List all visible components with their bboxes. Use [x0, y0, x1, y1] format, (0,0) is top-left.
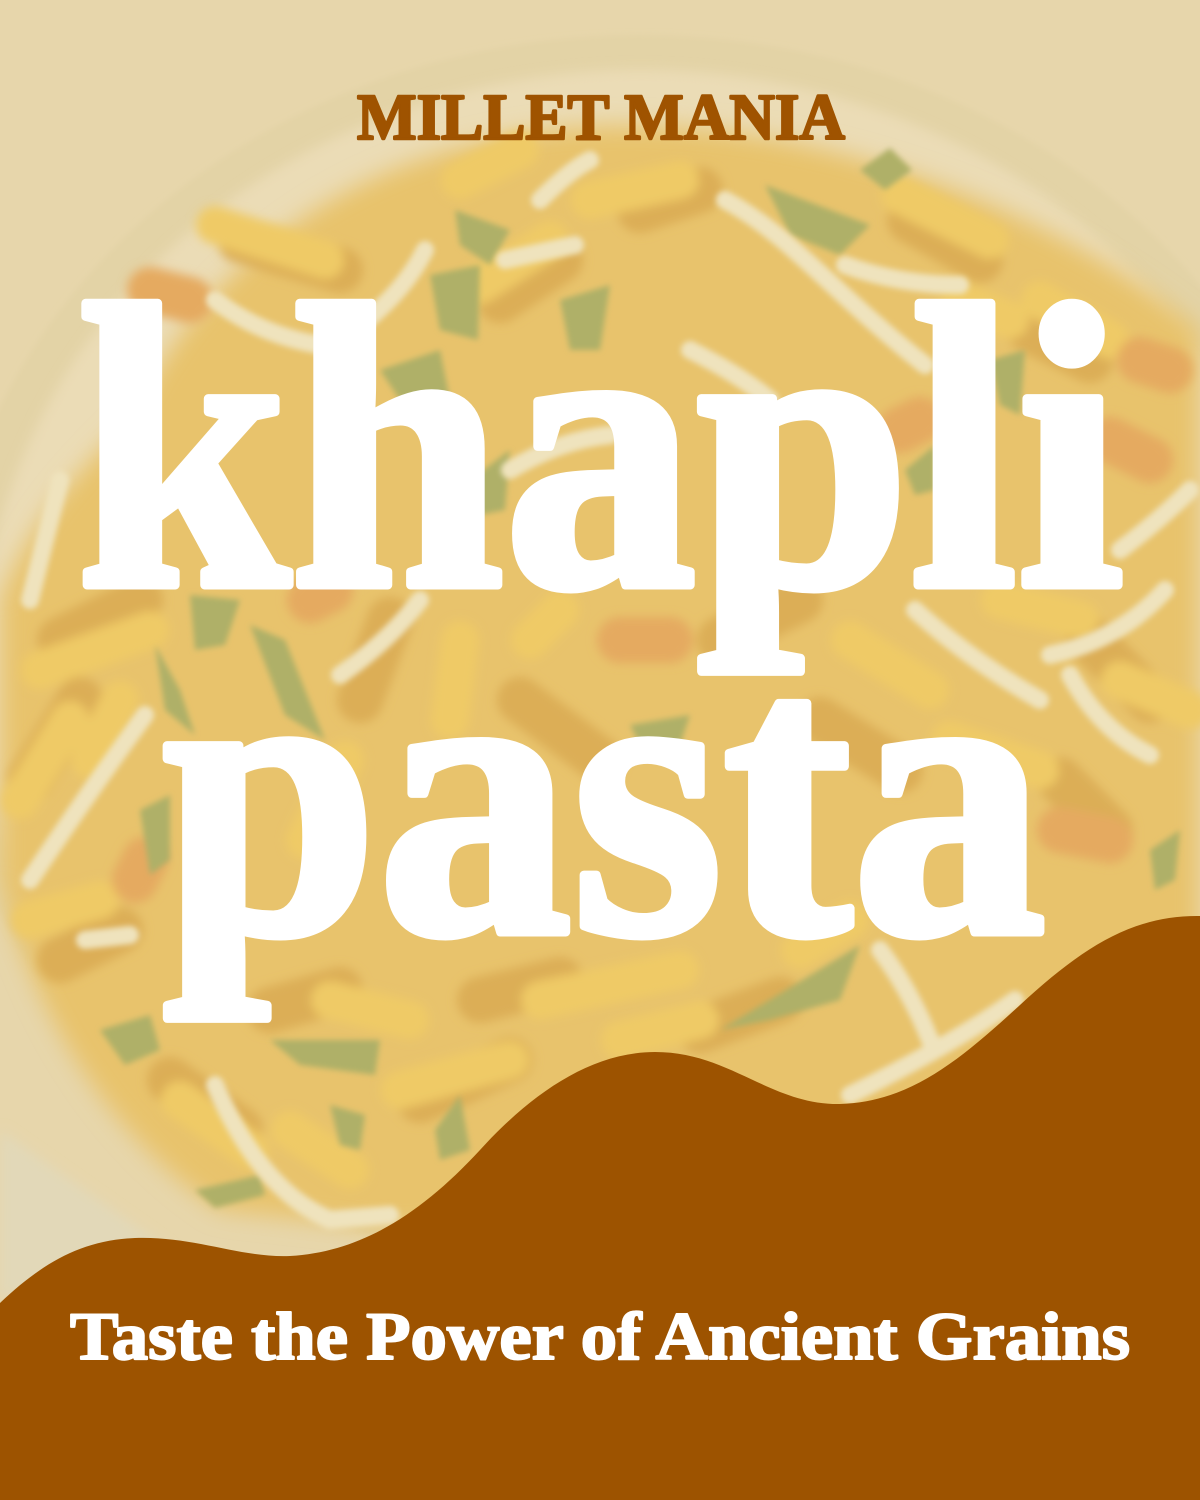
- tablecloth corner: [0, 1130, 170, 1300]
- pasta mass: [0, 125, 1200, 1230]
- title line: khapli: khapli: [76, 223, 1124, 674]
- title line: pasta: pasta: [162, 570, 1046, 1021]
- shredded cheese: [30, 160, 1190, 1220]
- brown wave panel: [0, 916, 1200, 1500]
- tagline: Taste the Power of Ancient Grains: [70, 1298, 1130, 1374]
- macaroni shadows and tubes: [20, 150, 1190, 1170]
- herbs: [100, 148, 1180, 1208]
- brand heading: MILLET MANIA: [357, 81, 845, 154]
